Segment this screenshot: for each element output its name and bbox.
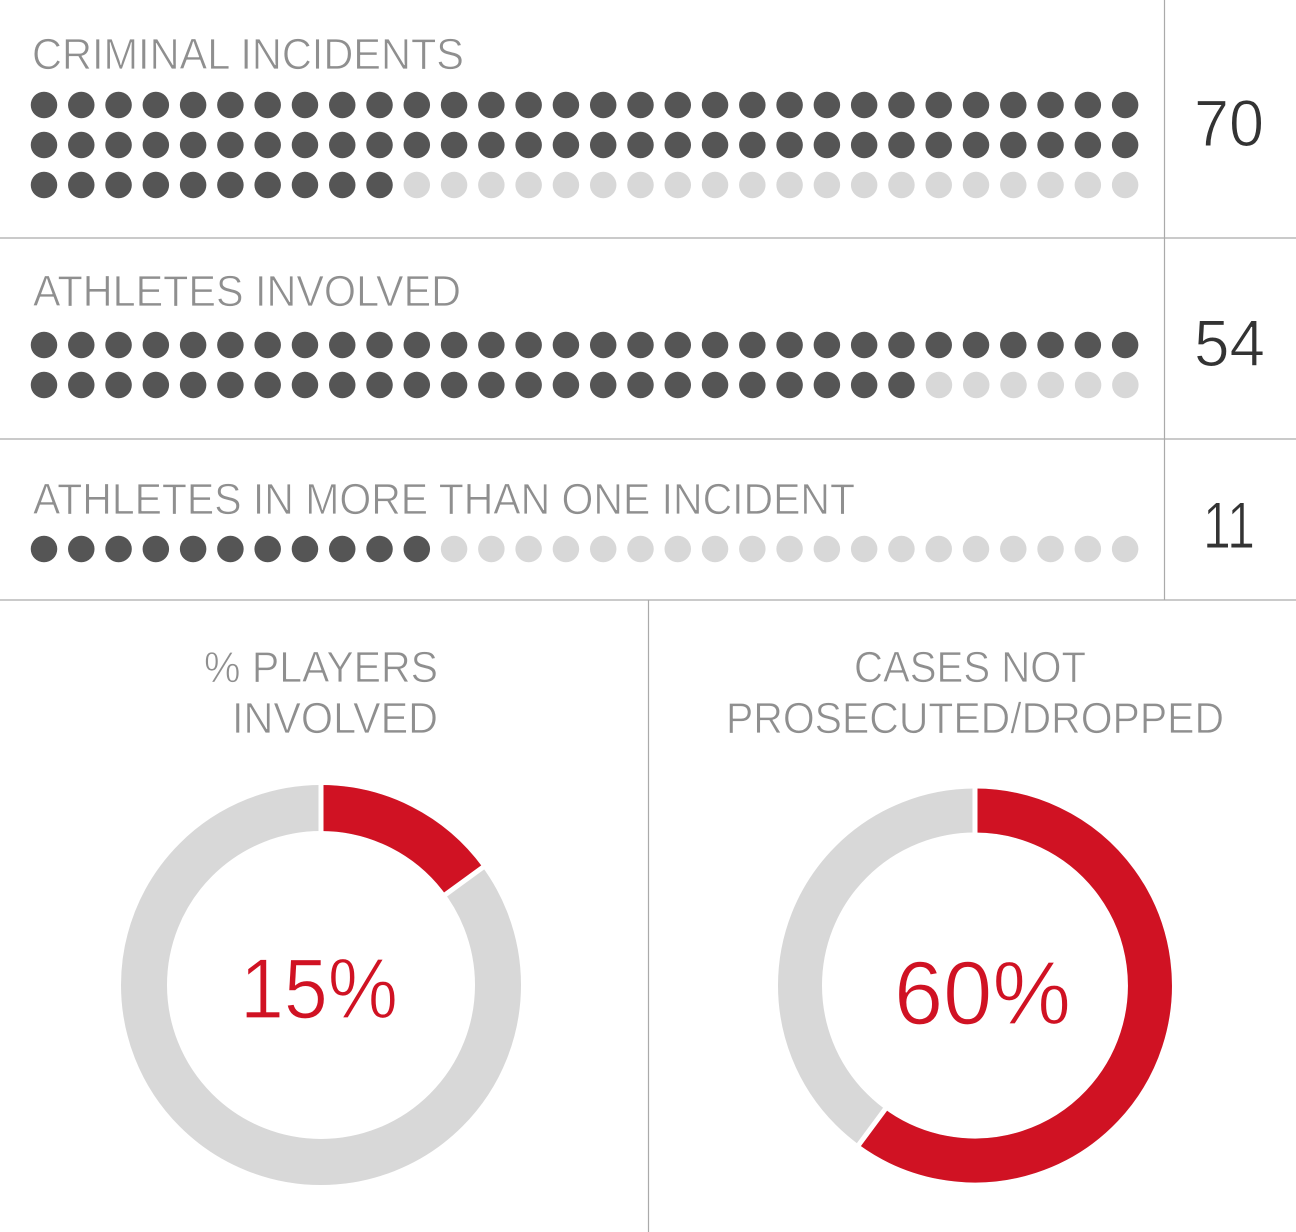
- number: 70: 70: [1194, 86, 1264, 160]
- heading: cases not prosecuted or dropped: [726, 644, 1224, 743]
- number: 54: 54: [1194, 306, 1265, 380]
- heading: cases not prosecuted or dropped: PROSECUTED/DROPPED: [726, 695, 1224, 743]
- panel: athletes involved: [33, 268, 1265, 385]
- donut chart: 15 percent: [144, 780, 498, 1162]
- donut chart: 60 percent: [800, 784, 1150, 1161]
- heading: percent players involved: % PLAYERS: [204, 644, 438, 692]
- heading: athletes in more than one incident: ATHLETES IN MORE THAN ONE INCIDENT: [33, 476, 855, 524]
- dot chart: 54 athletes involved: [44, 345, 1126, 385]
- panel: criminal incidents: [32, 31, 1264, 185]
- heading: criminal incidents: CRIMINAL INCIDENTS: [32, 31, 464, 79]
- heading: percent players involved: [204, 644, 438, 743]
- number: 11: 11: [1203, 488, 1255, 562]
- heading: percent players involved: INVOLVED: [232, 695, 438, 743]
- dot chart: 11 athletes: [44, 536, 1126, 562]
- value: 60%: 60%: [894, 944, 1071, 1044]
- dot chart: 70 criminal incidents: [44, 105, 1126, 185]
- value: 15%: 15%: [240, 942, 398, 1037]
- heading: cases not prosecuted or dropped: CASES NOT: [854, 644, 1086, 692]
- panel: athletes in more than one incident: [33, 476, 1255, 562]
- heading: athletes involved: ATHLETES INVOLVED: [33, 268, 461, 316]
- panel: percent players involved: [144, 644, 498, 1162]
- panel: cases not prosecuted or dropped: [726, 644, 1224, 1161]
